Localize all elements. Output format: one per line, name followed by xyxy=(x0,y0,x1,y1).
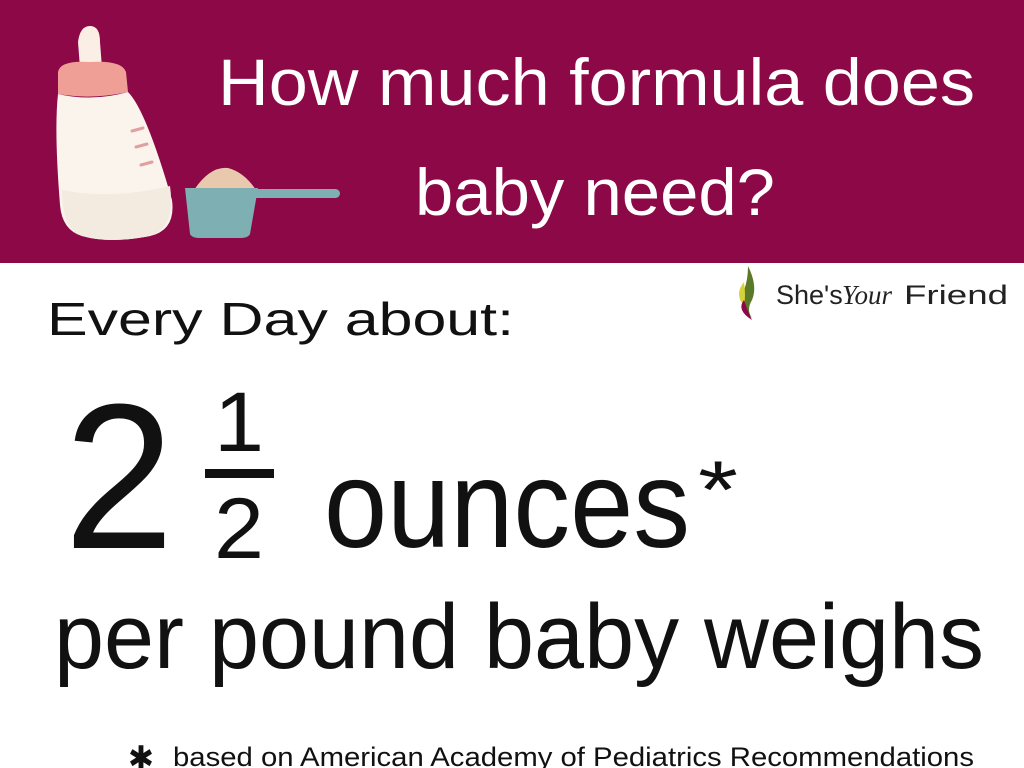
logo: She's Your Friend: Your xyxy=(842,280,893,310)
title xyxy=(218,45,975,229)
text: per pound baby weighs: per pound baby weighs xyxy=(54,586,984,688)
subheading: Every Day about: Every Day about: xyxy=(47,293,514,345)
big number 2 1/2 ounces: * xyxy=(698,445,738,536)
logo: She's Your Friend: Friend xyxy=(904,280,1008,310)
title: How much formula does xyxy=(218,45,975,119)
icon: baby bottle xyxy=(56,26,173,240)
big number 2 1/2 ounces xyxy=(64,361,738,592)
header banner xyxy=(0,0,1024,263)
logo: She's Your Friend: She's xyxy=(776,280,843,310)
icon: formula scoop xyxy=(185,168,340,238)
big number 2 1/2 ounces: 2 xyxy=(64,361,174,592)
title: baby need? xyxy=(415,155,775,229)
big number 2 1/2 ounces: 2 xyxy=(214,481,264,577)
big number 2 1/2 ounces: ounces xyxy=(324,436,690,574)
logo: She's Your Friend xyxy=(739,266,1008,320)
big number 2 1/2 ounces: 1 xyxy=(214,375,264,469)
